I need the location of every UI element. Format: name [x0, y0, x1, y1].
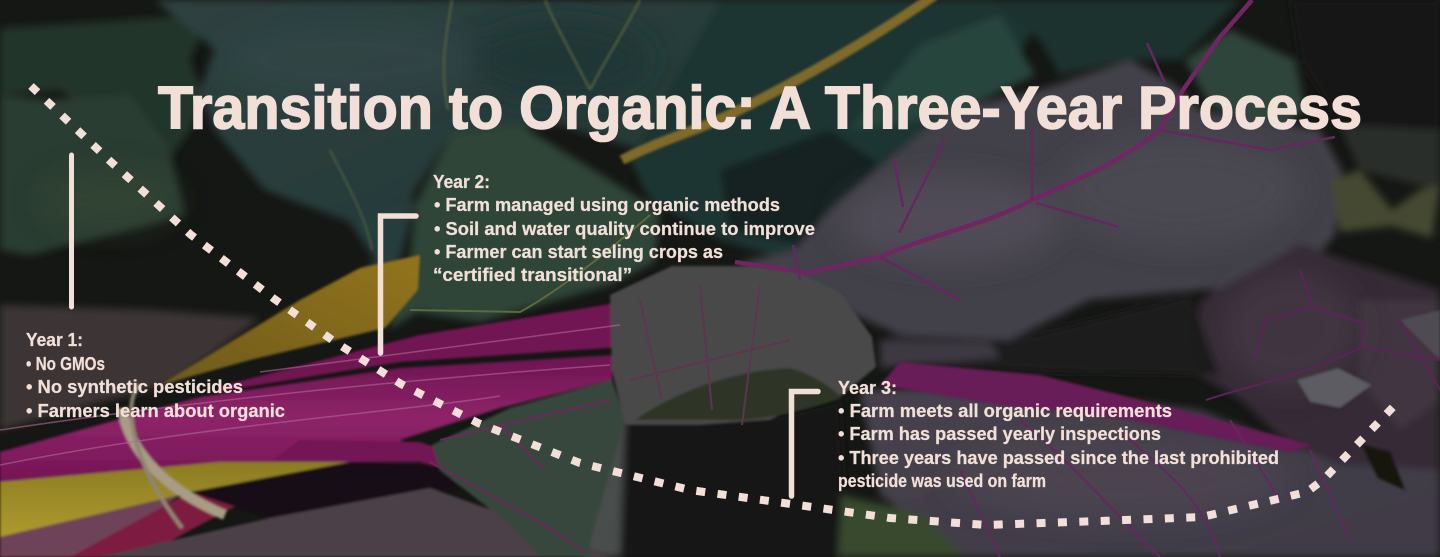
centre green leaf — [388, 125, 660, 330]
big purple-gray leaf — [740, 60, 1342, 345]
green-gray leaf lower middle — [432, 380, 625, 557]
year 2 text block: Year 2: — [433, 171, 490, 192]
dark leaf hole — [1362, 445, 1405, 490]
year 2 text block: “certified transitional” — [433, 264, 632, 285]
lower right leaf — [860, 385, 1440, 557]
dark pit and green bit — [612, 400, 960, 557]
yellow stalks — [160, 255, 420, 385]
year 3 text block: • Farm meets all organic requirements — [838, 400, 1172, 421]
magenta stalks — [215, 302, 622, 392]
grey lower stalk — [100, 488, 610, 557]
year 2 text block: • Soil and water quality continue to improve — [434, 218, 815, 239]
year 3 text block: • Farm has passed yearly inspections — [838, 423, 1161, 444]
year 2 text block — [433, 171, 815, 285]
yellow low stalk — [0, 458, 350, 537]
year 2 text block: • Farmer can start seling crops as — [434, 241, 723, 262]
year 3 bracket — [792, 392, 818, 496]
top-left leaves — [0, 14, 210, 165]
year 2 bracket — [380, 216, 416, 353]
dotted timeline curve — [31, 86, 1397, 525]
year 3 text block: pesticide was used on farm — [838, 470, 1046, 491]
year 1 text block — [26, 329, 285, 421]
year 3 text block: • Three years have passed since the last prohibited — [838, 447, 1279, 468]
title: Transition to Organic: A Three-Year Process — [158, 74, 1362, 142]
big top blue-green leaf — [155, 0, 740, 260]
purple crinkled centre leaf — [610, 266, 876, 425]
year 1 text block: • No synthetic pesticides — [26, 376, 243, 397]
black gap below the stalks — [190, 462, 470, 518]
year 1 text block: • Farmers learn about organic — [26, 400, 285, 421]
year 3 text block — [838, 377, 1279, 491]
rubber band — [122, 408, 225, 515]
year 2 text block: • Farm managed using organic methods — [434, 194, 780, 215]
year 3 text block: Year 3: — [838, 377, 897, 398]
year 1 marker line — [69, 155, 74, 307]
year 1 text block: Year 1: — [26, 329, 83, 350]
olive leaves right — [1330, 170, 1440, 238]
year 1 text block: • No GMOs — [26, 353, 105, 374]
